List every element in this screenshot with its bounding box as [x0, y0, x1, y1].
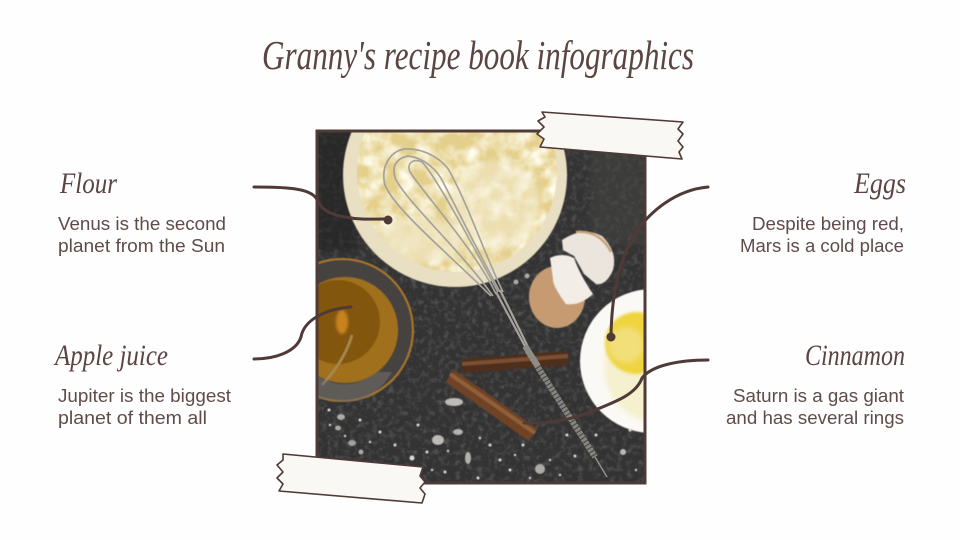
text: apple juice description: planet of them all [58, 408, 207, 428]
text: flour description: Venus is the second [58, 214, 226, 234]
plate with egg white and yolk [579, 288, 644, 434]
flour specks [328, 274, 637, 480]
heading: flour: Flour [59, 167, 117, 200]
text: flour description: planet from the Sun [58, 236, 225, 256]
heading: apple juice: Apple juice [53, 339, 168, 372]
whisk [384, 149, 607, 477]
connector: flour [254, 187, 392, 224]
text: cinnamon description: Saturn is a gas giant [733, 386, 904, 406]
text: eggs description: Despite being red, [752, 214, 904, 234]
cinnamon sticks [450, 356, 568, 435]
panel: recipe photo [316, 130, 646, 484]
tape: top right [537, 112, 683, 159]
tape: bottom left [277, 454, 425, 503]
text: apple juice description: Jupiter is the biggest [58, 386, 231, 406]
title: Granny's recipe book infographics [262, 32, 694, 78]
glass bowl of apple juice [318, 257, 415, 402]
text: eggs description: Mars is a cold place [740, 236, 904, 256]
photo frame [317, 131, 645, 483]
mixing bowl [342, 132, 568, 288]
connector: eggs [606, 187, 708, 342]
connector: cinnamon [524, 360, 708, 423]
heading: cinnamon: Cinnamon [805, 339, 905, 372]
heading: eggs: Eggs [853, 167, 906, 200]
text: cinnamon description: and has several rings [726, 408, 904, 428]
dark stone background [317, 131, 645, 483]
cracked egg shells [529, 232, 614, 328]
connector: apple juice [254, 307, 351, 359]
